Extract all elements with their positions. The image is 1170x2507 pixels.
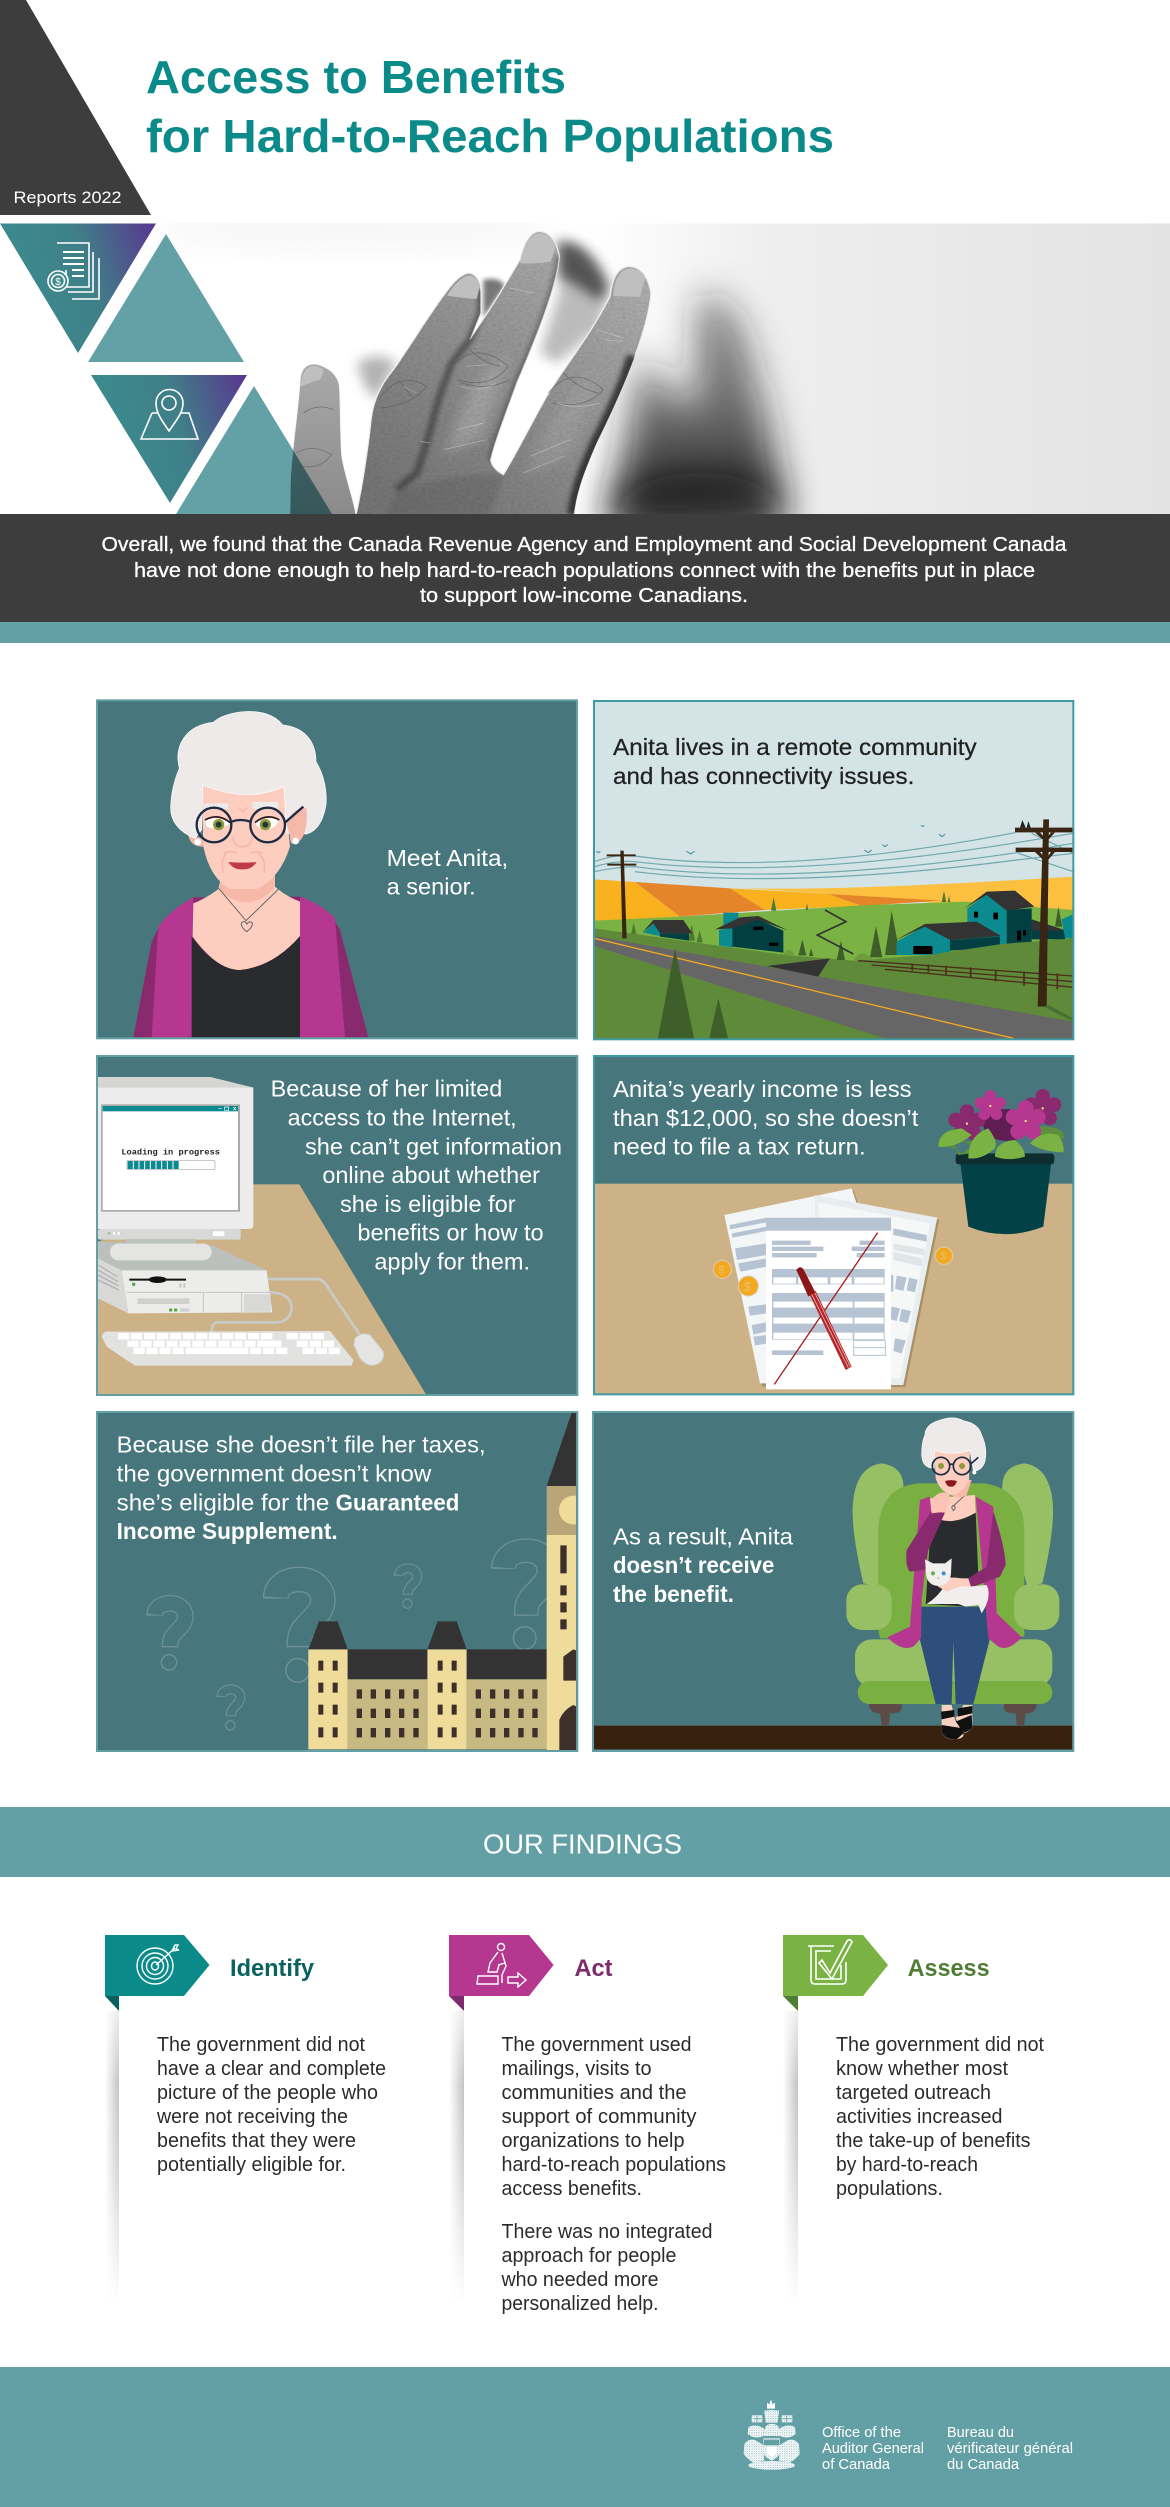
- ribbon: [783, 1935, 888, 2011]
- triangle: documents: $: [55, 277, 61, 288]
- panel text: Guaranteed: [336, 1489, 459, 1515]
- body text: [156, 2034, 386, 2176]
- pinky finger: [290, 364, 356, 515]
- finding: act: [449, 1935, 726, 2315]
- heading: Identify: [230, 1955, 315, 1982]
- side shadow: [451, 2011, 464, 2277]
- body text: hard-to-reach populations: [502, 2154, 726, 2176]
- panel text: [613, 1076, 919, 1160]
- keyboard: [102, 1331, 353, 1366]
- fence: [858, 961, 1073, 989]
- red cross-out line: [774, 1233, 878, 1384]
- summary text: Overall, we found that the Canada Revenue Agency and Employment and Social Development Canada: [102, 534, 1067, 556]
- office name english: Office of the: [822, 2425, 901, 2441]
- utility poles: [607, 819, 1073, 1007]
- Anita portrait: [133, 711, 368, 1037]
- title: [146, 51, 834, 162]
- tax papers: [724, 1188, 939, 1389]
- body text: who needed more: [501, 2269, 658, 2291]
- body text: [836, 2034, 1044, 2200]
- panel text: Because of her limited: [271, 1076, 502, 1102]
- title: Access to Benefits: [146, 51, 566, 103]
- summary band: [0, 514, 1170, 622]
- coins: $: [744, 1280, 751, 1294]
- office name french: Bureau du: [947, 2425, 1014, 2441]
- panel text: online about whether: [322, 1162, 540, 1188]
- body text: populations.: [836, 2178, 943, 2200]
- panel text: Because she doesn’t file her taxes,: [117, 1432, 486, 1458]
- panel text: benefits or how to: [357, 1220, 544, 1246]
- body text: benefits that they were: [157, 2130, 356, 2152]
- body text: have a clear and complete: [157, 2058, 386, 2080]
- triangle: teal upper: [88, 234, 244, 362]
- office name english: [822, 2425, 924, 2473]
- crest: coat of arms: [743, 2399, 800, 2471]
- trees: [658, 948, 728, 1039]
- panel text: apply for them.: [374, 1249, 530, 1275]
- floor: [594, 1726, 1072, 1749]
- body text: organizations to help: [502, 2130, 684, 2152]
- fingers and palm: [356, 231, 651, 515]
- panel: remote community: [594, 701, 1073, 1039]
- side shadow: [107, 2011, 119, 2277]
- office name french: [947, 2425, 1073, 2473]
- footer: [0, 2367, 1170, 2507]
- white cat: [925, 1558, 989, 1613]
- body text: were not receiving the: [156, 2106, 348, 2128]
- icon: documents with dollar coin: [48, 243, 99, 299]
- body text: by hard-to-reach: [836, 2154, 978, 2176]
- panel text: access to the Internet,: [288, 1104, 517, 1130]
- power lines: [594, 833, 1073, 879]
- body text: targeted outreach: [836, 2082, 991, 2104]
- panel text: she’s eligible for the: [117, 1489, 329, 1515]
- mouse: [354, 1334, 384, 1365]
- panel text: she can’t get information: [305, 1133, 562, 1159]
- heading: Assess: [908, 1955, 990, 1982]
- summary text: [102, 534, 1067, 607]
- panel text: doesn’t receive: [613, 1552, 774, 1578]
- triangle: teal lower: [176, 386, 332, 514]
- heading: Act: [574, 1955, 613, 1982]
- header: [0, 0, 834, 215]
- body text: mailings, visits to: [502, 2058, 652, 2080]
- ribbon: [449, 1935, 554, 2011]
- Anita seated: [887, 1418, 1022, 1739]
- panel text: a senior.: [387, 874, 476, 900]
- side shadow: [785, 2011, 798, 2277]
- desk: [98, 1184, 426, 1394]
- icon: checkbox: [808, 1940, 852, 1984]
- parliament building: [308, 1413, 588, 1750]
- office name french: vérificateur général: [947, 2441, 1073, 2457]
- panel text: and has connectivity issues.: [613, 763, 914, 789]
- body text: potentially eligible for.: [157, 2154, 346, 2176]
- computer: [98, 1077, 384, 1366]
- summary text: have not done enough to help hard-to-reach populations connect with the benefits put in place: [134, 560, 1035, 582]
- birds: [596, 825, 945, 854]
- coins: $: [718, 1265, 725, 1277]
- finger shading: [353, 230, 653, 516]
- coins: [713, 1247, 953, 1296]
- panel text: Income Supplement.: [117, 1518, 338, 1544]
- panel text: [271, 1076, 562, 1275]
- icon: target: [137, 1945, 179, 1984]
- body text: support of community: [502, 2106, 696, 2128]
- ribbon: [105, 1935, 210, 2011]
- icon triangles: [0, 224, 332, 514]
- houses: [642, 891, 1073, 957]
- body text: There was no integrated: [502, 2221, 712, 2243]
- panel text: [117, 1432, 486, 1544]
- flower pot: [938, 1089, 1064, 1234]
- icon: map pin: [141, 390, 198, 439]
- panel text: Anita lives in a remote community: [613, 734, 977, 760]
- finding: assess: [783, 1935, 1044, 2304]
- panel text: need to file a tax return.: [613, 1134, 866, 1160]
- panel text: As a result, Anita: [613, 1523, 793, 1549]
- office name english: of Canada: [822, 2457, 891, 2473]
- foreground hills: [594, 928, 1073, 1039]
- body text: access benefits.: [502, 2178, 642, 2200]
- hand photograph: [290, 224, 1170, 514]
- body text: approach for people: [502, 2245, 676, 2267]
- panel text: [613, 734, 977, 789]
- dark corner triangle: [0, 0, 151, 215]
- panel text: than $12,000, so she doesn’t: [613, 1105, 919, 1131]
- body text: the take-up of benefits: [836, 2130, 1030, 2152]
- road: [594, 936, 1073, 1038]
- panel text: Anita’s yearly income is less: [613, 1076, 912, 1102]
- question marks: [155, 1551, 549, 1730]
- wall shadows: [147, 210, 785, 560]
- panel text: Meet Anita,: [387, 845, 508, 871]
- office name french: du Canada: [947, 2457, 1020, 2473]
- progress bar: [127, 1160, 215, 1170]
- panel text: [387, 845, 508, 900]
- panel text: [613, 1523, 793, 1607]
- coins: $: [940, 1251, 946, 1263]
- panel: income and tax return: [594, 1056, 1073, 1394]
- body text: [501, 2034, 726, 2315]
- panel text: she is eligible for: [340, 1191, 516, 1217]
- body text: communities and the: [502, 2082, 686, 2104]
- body text: personalized help.: [502, 2293, 658, 2315]
- body text: The government used: [502, 2034, 692, 2056]
- title: for Hard-to-Reach Populations: [146, 110, 834, 162]
- office name english: Auditor General: [822, 2441, 924, 2457]
- crack in road: [817, 910, 853, 954]
- panel: computer and limited internet: [97, 1056, 577, 1395]
- body text: The government did not: [836, 2034, 1044, 2056]
- icon: person stepping with arrow: [477, 1944, 526, 1987]
- finding: identify: [105, 1935, 386, 2304]
- pen: [796, 1267, 852, 1370]
- triangle: location: [91, 375, 247, 503]
- body text: activities increased: [836, 2106, 1002, 2128]
- body text: The government did not: [157, 2034, 365, 2056]
- findings banner: [0, 1807, 1170, 1877]
- triangle: documents: [0, 224, 156, 353]
- knuckle wrinkles: [297, 288, 623, 473]
- loading label: Loading in progress: [121, 1147, 220, 1157]
- body text: picture of the people who: [157, 2082, 378, 2104]
- panel: result, Anita in armchair: [593, 1412, 1073, 1751]
- body text: know whether most: [836, 2058, 1008, 2080]
- summary text: to support low-income Canadians.: [420, 585, 748, 607]
- panel: government and supplement: [97, 1412, 588, 1751]
- panel text: the government doesn’t know: [117, 1460, 431, 1486]
- fields: [732, 877, 1073, 912]
- armchair: [846, 1463, 1059, 1725]
- findings heading: OUR FINDINGS: [483, 1828, 682, 1860]
- panel: meet Anita: [97, 700, 577, 1038]
- report label: Reports 2022: [14, 188, 122, 207]
- panel text: the benefit.: [613, 1581, 734, 1607]
- nails: [301, 233, 645, 386]
